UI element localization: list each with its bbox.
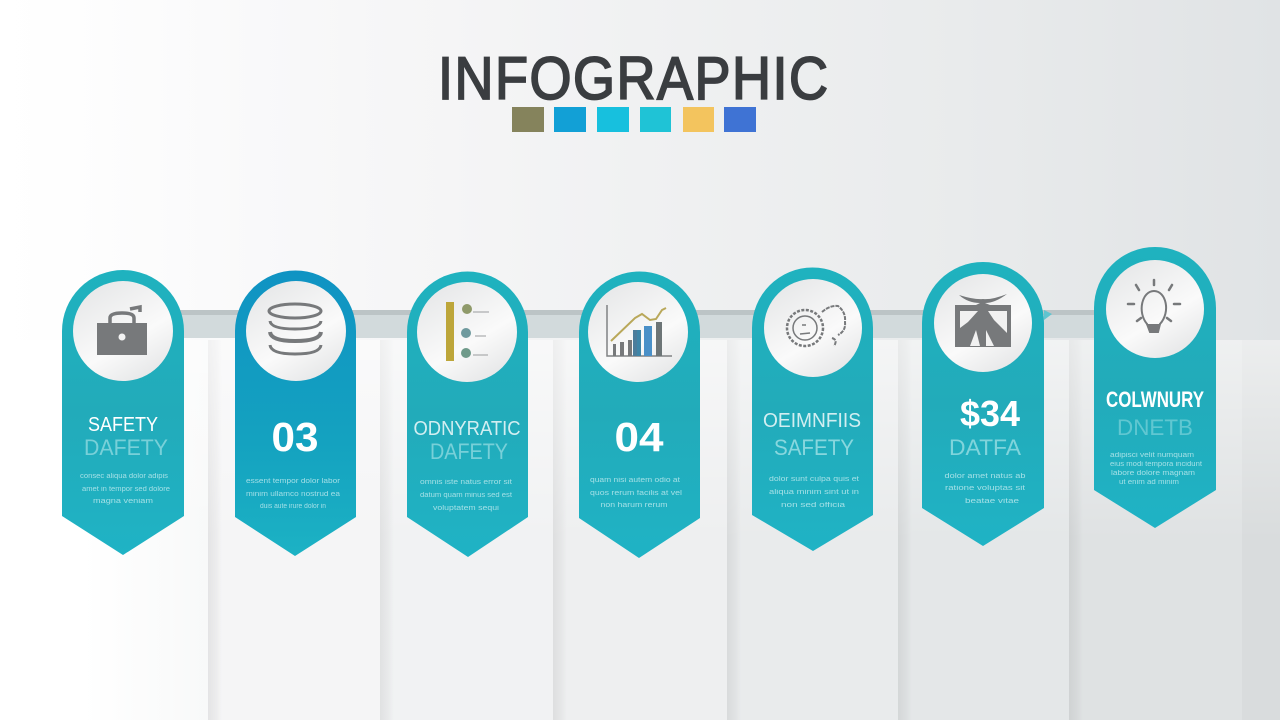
icon: stacked discs <box>269 304 321 354</box>
body text: adipisci velit numquam <box>1110 452 1194 459</box>
body text: magna veniam <box>93 498 153 505</box>
number: $34 <box>960 393 1020 434</box>
body text: voluptatem sequi <box>433 505 500 512</box>
panel 7: country <box>1094 247 1216 528</box>
body text: eius modi tempora incidunt <box>1110 461 1202 468</box>
icon: light bulb <box>1128 280 1180 332</box>
body text <box>944 473 1026 505</box>
panel 3: dynamic <box>407 272 528 557</box>
colour swatches <box>512 107 756 132</box>
subheading: SAFETY <box>774 435 854 460</box>
icon: briefcase <box>97 307 147 355</box>
body text: amet in tempor sed dolore <box>82 486 170 493</box>
connector bar <box>180 310 1095 338</box>
body text: essent tempor dolor labor <box>246 478 341 485</box>
body text: dolor amet natus ab <box>944 473 1026 480</box>
body text <box>590 477 683 509</box>
body text <box>246 478 341 510</box>
panel 5: safety <box>752 267 873 551</box>
heading: OEIMNFIIS <box>763 410 861 432</box>
body text: labore dolore magnam <box>1111 470 1195 477</box>
body text: quam nisi autem odio at <box>590 477 680 484</box>
body text <box>1110 452 1202 486</box>
icon: building with emblem <box>955 294 1011 347</box>
body text: ut enim ad minim <box>1119 479 1179 486</box>
column strips <box>0 340 1280 720</box>
body text: non sed officia <box>781 502 845 509</box>
body text: minim ullamco nostrud ea <box>246 491 340 498</box>
icon: gear and brain <box>787 306 845 346</box>
body text: omnis iste natus error sit <box>420 479 512 486</box>
body text: dolor sunt culpa quis et <box>769 476 859 483</box>
subheading: DATFA <box>949 435 1021 460</box>
body text: consec aliqua dolor adipis <box>80 473 169 480</box>
icon: checklist <box>446 302 489 361</box>
body text: quos rerum facilis at vel <box>590 490 683 497</box>
body text: ratione voluptas sit <box>945 485 1025 492</box>
body text: datum quam minus sed est <box>420 492 512 499</box>
subheading: DAFETY <box>84 435 168 460</box>
heading: SAFETY <box>88 414 158 436</box>
panel 1: safety <box>62 270 184 555</box>
heading: ODNYRATIC <box>414 418 520 440</box>
body text: non harum rerum <box>600 502 668 509</box>
body text: aliqua minim sint ut in <box>769 489 859 496</box>
number: 03 <box>272 414 318 460</box>
subheading: DAFETY <box>430 439 508 464</box>
body text <box>420 479 512 512</box>
panel 2: 03 <box>235 270 356 556</box>
body text <box>80 473 170 505</box>
heading: COLWNURY <box>1106 387 1204 412</box>
subheading: DNETB <box>1117 415 1193 440</box>
number: 04 <box>614 414 664 460</box>
body text: beatae vitae <box>965 498 1019 505</box>
body text <box>769 476 859 509</box>
body text: duis aute irure dolor in <box>260 503 326 510</box>
icon: bar and line chart <box>607 305 672 356</box>
panel 4: 04 <box>579 272 700 558</box>
panel 6: data <box>922 262 1052 546</box>
title: INFOGRAPHIC <box>438 45 828 113</box>
